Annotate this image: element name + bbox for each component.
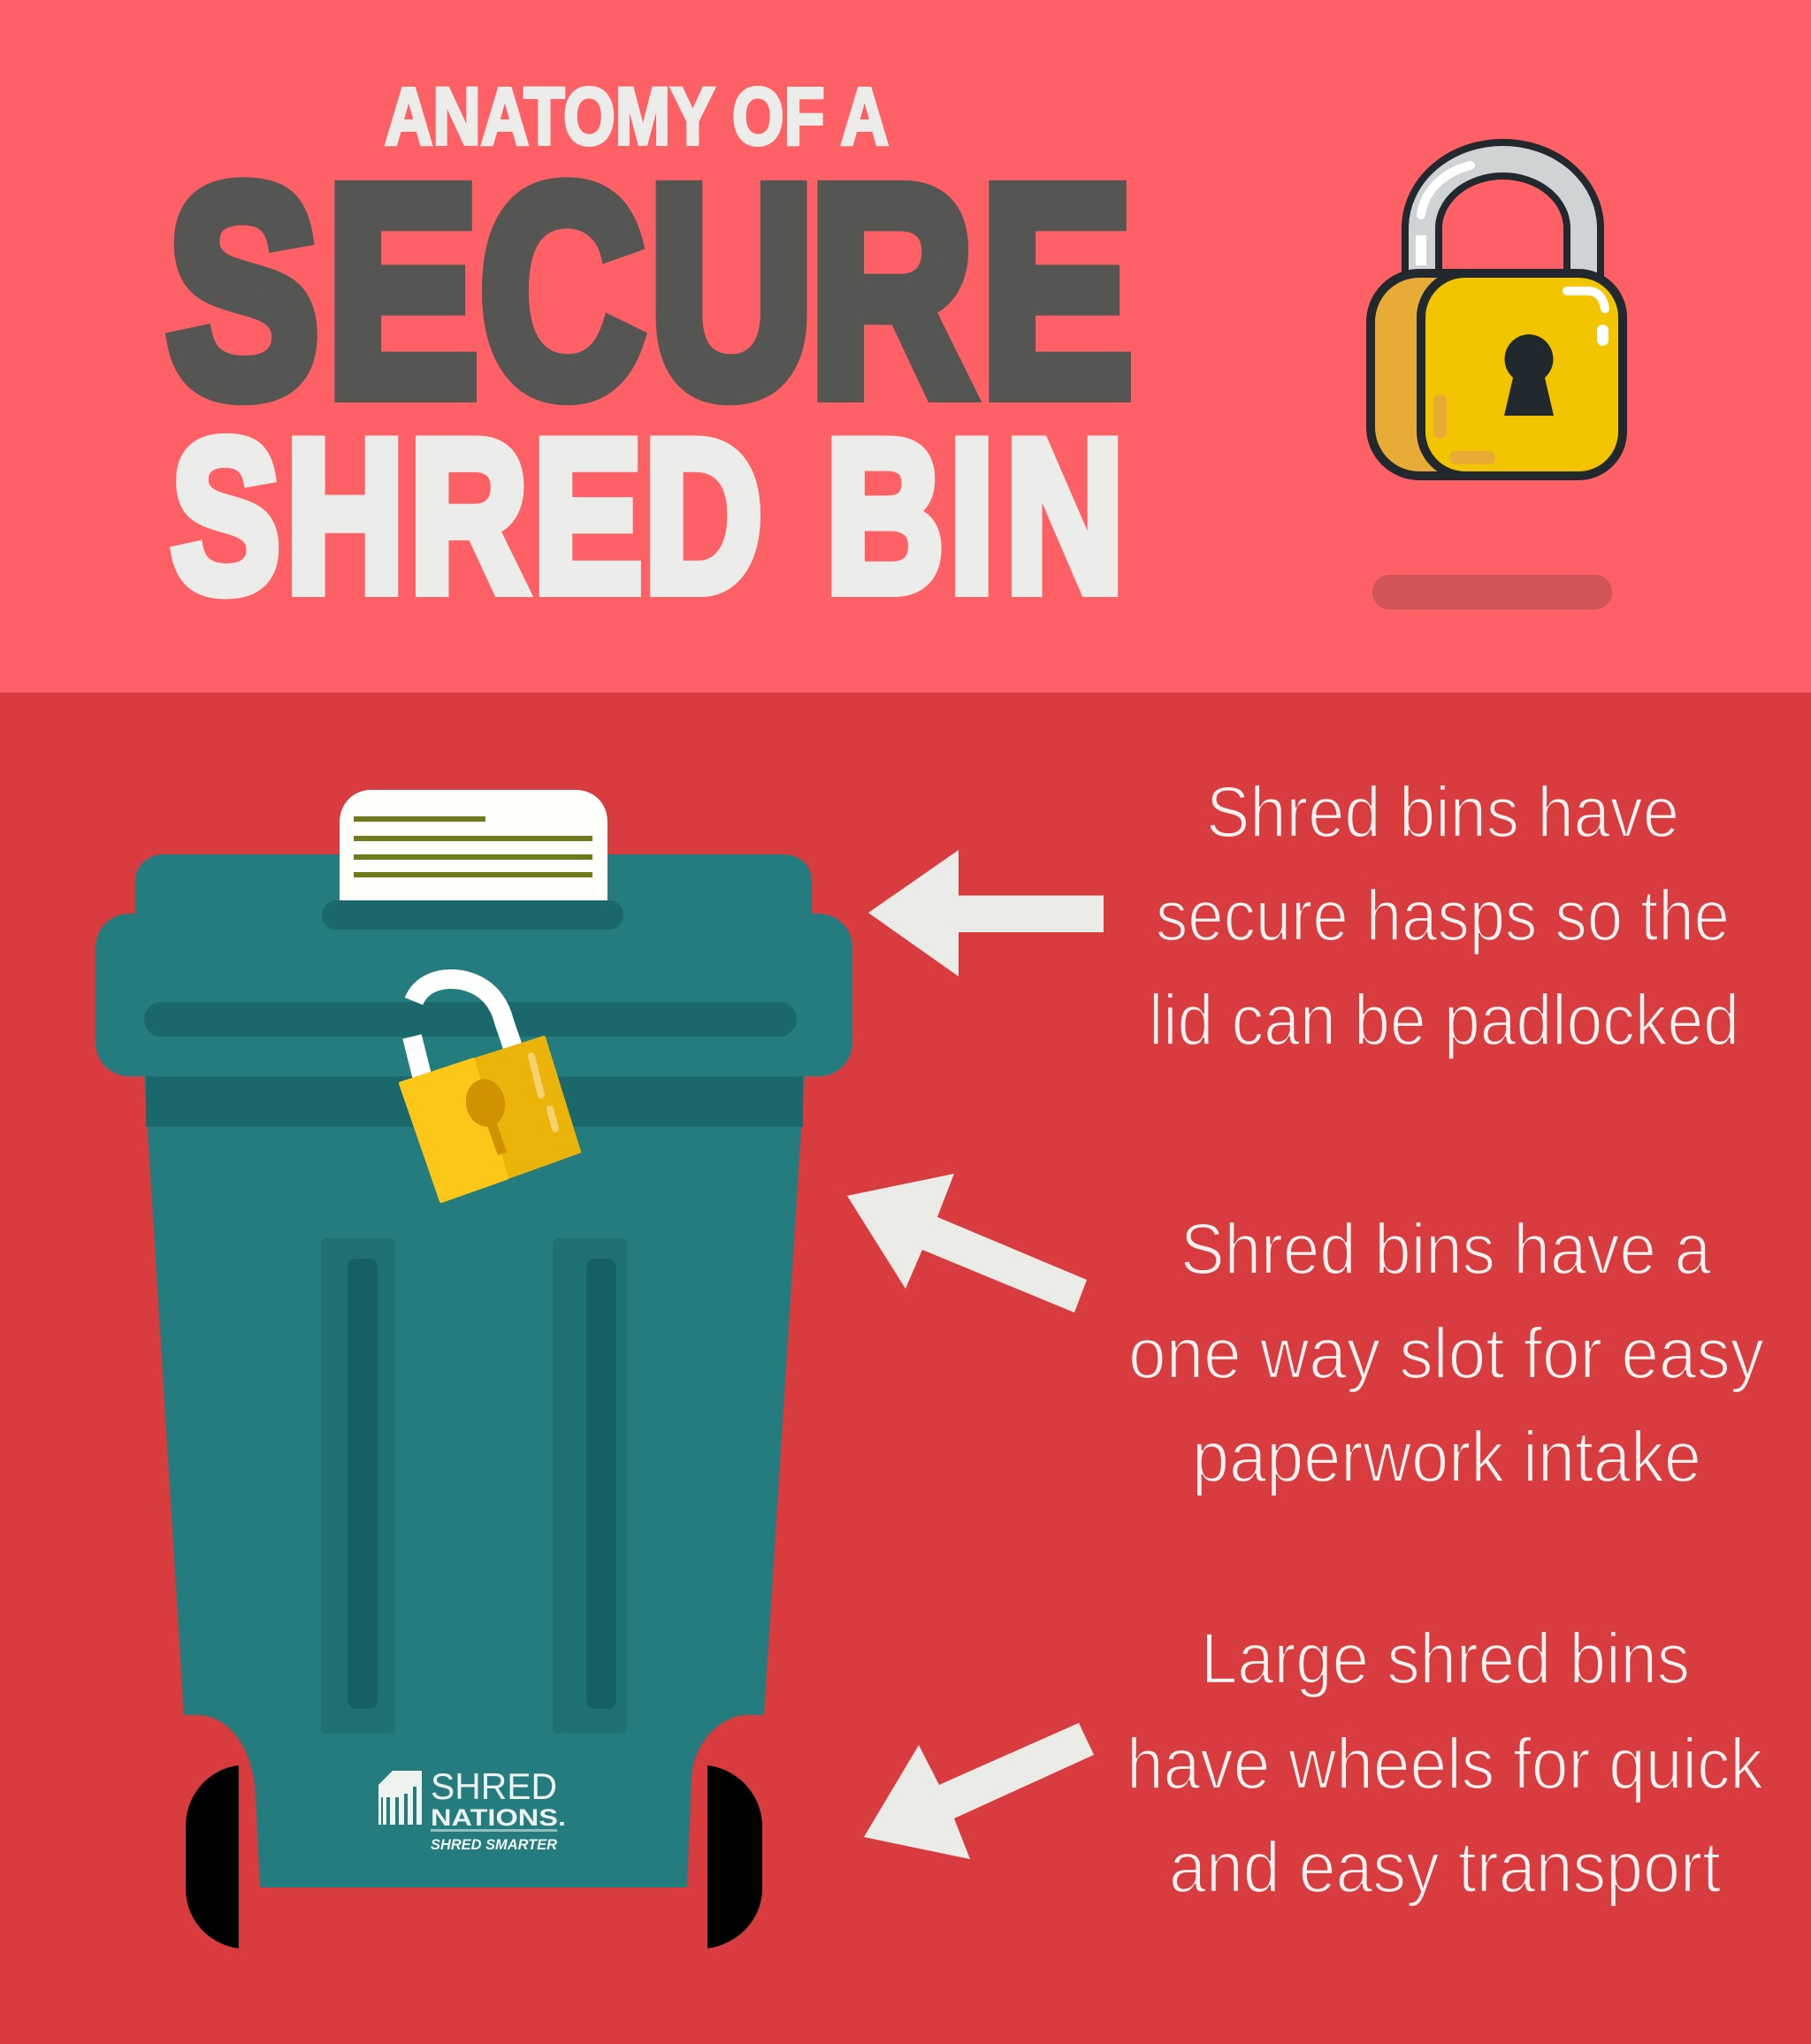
text block: secure hasps [1149,772,1739,1060]
bin wheels [186,1765,762,1948]
text block: one way slot: paperwork intake [1192,1417,1701,1497]
left handle recess [321,1238,395,1734]
text block: secure hasps: secure hasps so the [1156,876,1730,956]
padlock keyhole [1504,334,1554,416]
lid hasp band [144,1002,797,1037]
title [167,72,1133,638]
paper slot [322,900,623,930]
text block: wheels: and easy transport [1169,1827,1721,1908]
logo: Shred Nations: SHRED SMARTER [431,1836,558,1853]
text block: wheels: Large shred bins [1201,1619,1690,1699]
right handle recess [553,1238,627,1734]
illustration: shred bin [96,790,852,1948]
bin lower lid [96,914,852,1076]
text block: one way slot [1128,1209,1764,1497]
heading: shred bin: SHRED BIN [171,395,1124,638]
text block: secure hasps: lid can be padlocked [1149,980,1739,1060]
logo mark [378,1771,422,1825]
heading: anatomy of a: ANATOMY OF A [385,72,889,162]
bin upper lid [135,854,812,920]
logo wordmark: SHRED [431,1765,557,1807]
body dark band [146,1076,803,1127]
panel: bin section background [0,693,1811,2044]
arrow: to paper slot [847,1174,1087,1313]
arrow: to wheels [864,1723,1094,1859]
padlock back body [1371,273,1623,476]
logo: Shred Nations: NATIONS. [431,1804,566,1831]
padlock shackle [1422,159,1584,283]
heading: secure: SECURE [167,125,1133,457]
padlock front body [1421,273,1623,476]
text block: secure hasps: Shred bins have [1206,772,1679,853]
text block: one way slot: one way slot for easy [1128,1313,1764,1394]
icon: large padlock [1371,159,1623,476]
bin body [144,1075,805,1887]
logo: Shred Nations [378,1765,566,1853]
text block: one way slot: Shred bins have a [1181,1209,1711,1290]
icon: small open padlock [401,979,579,1201]
paper sheet entering slot [340,790,607,901]
padlock shadow [1372,575,1612,609]
text block: wheels [1127,1619,1764,1908]
panel: header background [0,0,1811,693]
arrow: to lid hasp [868,850,1104,976]
text block: wheels: have wheels for quick [1127,1724,1764,1804]
